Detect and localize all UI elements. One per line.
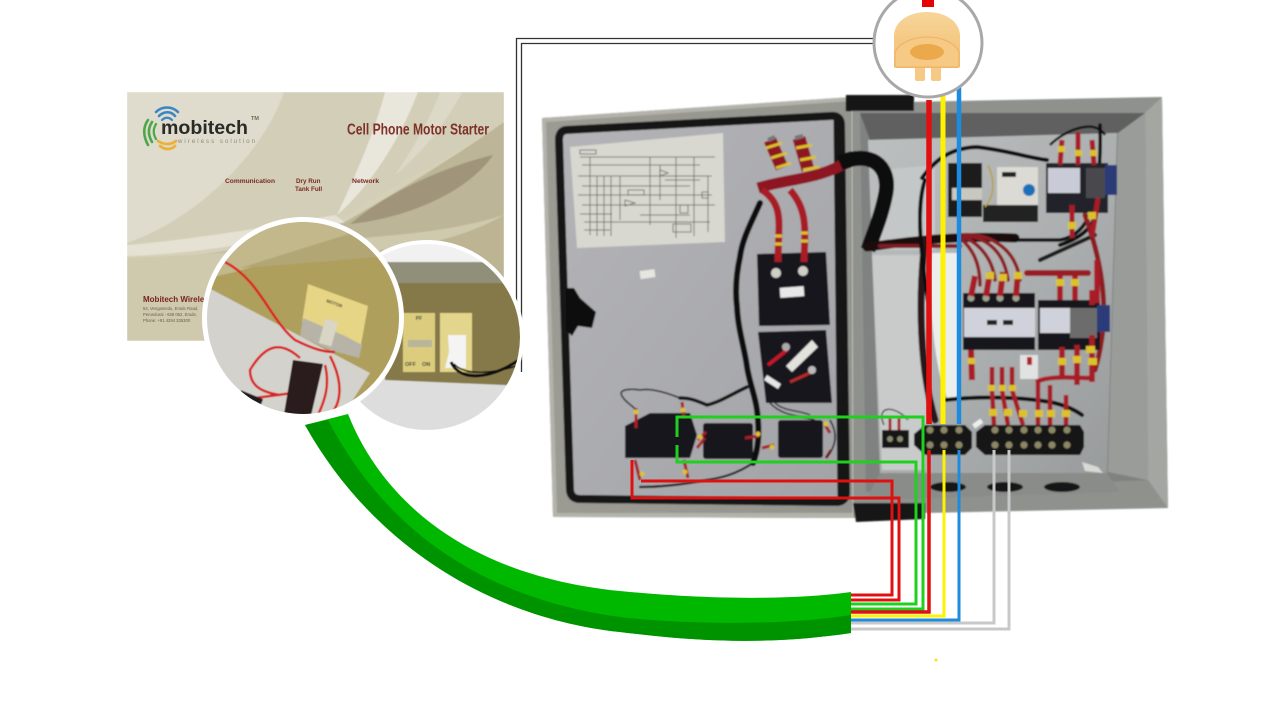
wiring diagram sheet: [570, 133, 725, 248]
black door-to-box flexible conduit: [840, 158, 887, 250]
contactor left: [963, 272, 1035, 380]
cable knock-outs: [930, 482, 1080, 492]
wiring overlay: [632, 0, 1009, 629]
logo: mobitech: mobitech: [161, 118, 248, 139]
inset: power socket close-up circle left: MOTOR: [326, 298, 344, 309]
inset: device close-up circle right: ON: [422, 362, 430, 368]
panel: enclosure open door: [542, 97, 853, 518]
red power cables: [758, 136, 850, 262]
glare: [931, 253, 960, 400]
overload relay and transformer: [948, 163, 1038, 222]
company address block: [143, 295, 247, 323]
label: Dry Run Tank Full: Tank Full: [295, 186, 322, 193]
label: Communication: Communication: [225, 178, 275, 185]
label: Dry Run Tank Full: Dry Run: [296, 178, 321, 185]
inset: device close-up circle right: PF: [416, 316, 422, 322]
wire: green upper: [677, 445, 916, 604]
cable: bundled green conduit: [305, 414, 851, 641]
door hinge bottom: [853, 503, 925, 522]
wire: red supply lower: [851, 450, 929, 612]
wire: yellow supply upper: [940, 96, 946, 424]
panel: product front card: [127, 92, 504, 341]
meter bottom: [758, 330, 832, 420]
socket label: [440, 313, 472, 372]
cable trunk: [867, 125, 1104, 420]
panel: enclosure body: [840, 95, 1168, 522]
black wire loom on door: [621, 203, 760, 487]
connecting control wire: [516, 38, 873, 372]
door latch: [566, 288, 596, 336]
plug input red wire stub: [922, 0, 934, 7]
company address block: Phone: +91 4294 335300: [143, 318, 191, 323]
wire: blue supply lower: [851, 450, 959, 620]
company address block: 54, Vengamedu, Erode Road,: [143, 306, 198, 311]
wire: gray 1: [851, 450, 994, 623]
small terminal block: [882, 409, 909, 448]
back plate: [868, 133, 1117, 473]
wire: yellow supply lower: [851, 450, 944, 616]
logo: mobitech: TM: [251, 116, 259, 122]
inset: device close-up circle right: [360, 240, 522, 430]
yellow wire markers: [988, 385, 1070, 417]
company address block: Perundurai - 638 052, Erode,: [143, 312, 197, 317]
label: Network: Network: [352, 178, 380, 185]
heading: Cell Phone Motor Starter: Cell Phone Motor Starter: [347, 122, 489, 138]
inset: device close-up circle right: OFF: [405, 362, 417, 368]
contactor right: [1020, 260, 1110, 385]
door hinge top: [846, 95, 914, 111]
logo: mobitech: wireless solution: [177, 139, 255, 145]
wire: red supply upper: [926, 100, 932, 424]
wire: door red 2: [632, 460, 899, 600]
small label: [640, 269, 655, 279]
meter top: [757, 252, 830, 326]
power socket label: [302, 284, 368, 350]
wire: blue supply upper: [957, 0, 961, 424]
red wires to terminals: [992, 367, 1090, 425]
main terminal strip: [914, 419, 1084, 455]
switch label: [403, 313, 435, 372]
contactor top: [1046, 127, 1117, 238]
red cable strand: [225, 262, 339, 415]
logo: mobitech: [144, 108, 259, 149]
speck: [934, 658, 938, 662]
mounting bracket: [1082, 462, 1103, 473]
door relays and terminals: [625, 402, 835, 480]
door gasket: [559, 116, 846, 502]
wire: gray 2: [851, 450, 1009, 629]
inset: power socket close-up circle left: [200, 217, 410, 420]
wire: green lower: [677, 417, 923, 609]
wire: door red 1: [641, 481, 892, 595]
company address block: Mobitech Wireless Solution: [143, 295, 247, 304]
icon: plug in circle: [874, 0, 982, 97]
